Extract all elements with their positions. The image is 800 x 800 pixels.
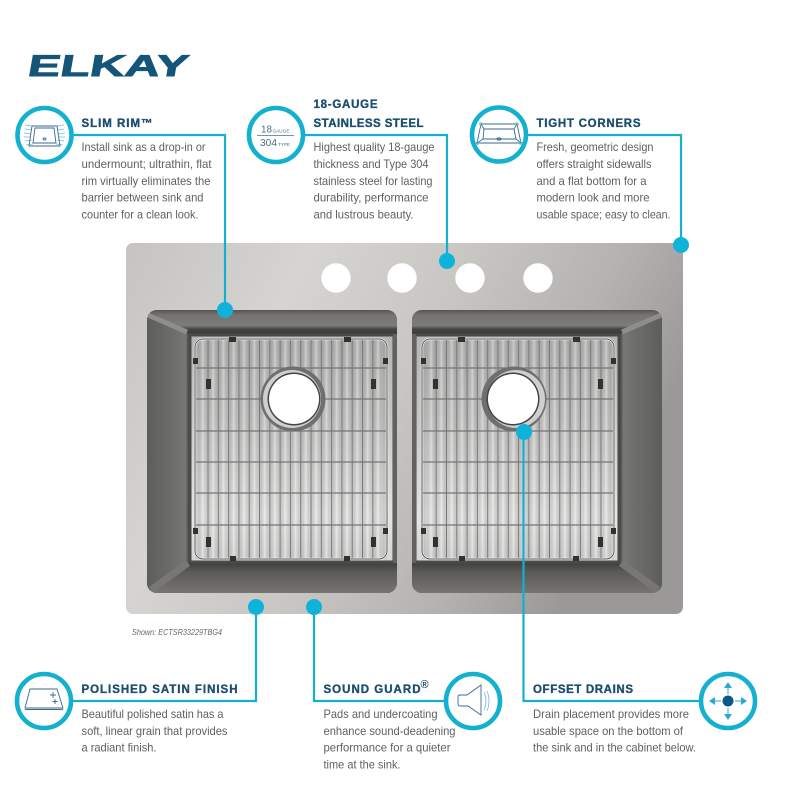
heading <box>314 99 424 130</box>
leader line <box>70 607 256 701</box>
body text: rim virtually eliminates the <box>82 174 211 188</box>
leader line <box>70 135 225 310</box>
body text: usable space on the bottom of <box>533 724 684 738</box>
heading: OFFSET DRAINS <box>533 684 633 696</box>
heading: POLISHED SATIN FINISH <box>82 684 238 696</box>
leader line <box>302 135 447 261</box>
body text: counter for a clean look. <box>82 208 198 222</box>
anchor dot <box>516 424 532 440</box>
callout: tight corners <box>472 108 689 253</box>
body text <box>533 707 696 754</box>
body text: and a flat bottom for a <box>536 174 647 188</box>
heading <box>324 679 429 696</box>
heading: SLIM RIM™ <box>82 118 152 130</box>
anchor dot <box>673 237 689 253</box>
icon: polished surface <box>17 674 71 728</box>
body text: barrier between sink and <box>82 190 204 204</box>
faucet holes <box>321 263 553 293</box>
logo: Elkay: ELKAY <box>25 50 191 83</box>
callout: offset drains <box>516 424 755 754</box>
body text: Fresh, geometric design <box>536 140 654 154</box>
body text: Install sink as a drop-in or <box>82 140 206 154</box>
anchor dot <box>217 302 233 318</box>
icon: gauge label: TYPE <box>278 142 290 147</box>
icon: gauge label: 18 <box>261 124 272 136</box>
anchor dot <box>306 599 322 615</box>
leader line <box>524 432 702 701</box>
icon: sink rim <box>18 108 72 162</box>
icon: gauge label <box>249 108 303 162</box>
heading: 18-GAUGE <box>314 99 378 111</box>
body text <box>82 140 212 222</box>
body text: a radiant finish. <box>82 740 156 754</box>
body text: the sink and in the cabinet below. <box>533 740 696 754</box>
body text: stainless steel for lasting <box>314 174 432 188</box>
body text: soft, linear grain that provides <box>82 724 228 738</box>
right drain <box>482 366 546 432</box>
body text: Drain placement provides more <box>533 707 689 721</box>
body text <box>324 707 456 772</box>
body text: Highest quality 18-gauge <box>314 140 435 154</box>
anchor dot <box>439 253 455 269</box>
body text: offers straight sidewalls <box>536 157 652 171</box>
body text: and lustrous beauty. <box>314 208 414 222</box>
body text <box>82 707 228 754</box>
leader line <box>314 607 447 701</box>
body text: performance for a quieter <box>324 740 450 754</box>
callout: 18-gauge stainless steel <box>249 99 455 269</box>
anchor dot <box>248 599 264 615</box>
heading: TIGHT CORNERS <box>536 118 641 130</box>
body text: modern look and more <box>536 190 650 204</box>
icon: gauge label: 304 <box>260 138 277 149</box>
body text: usable space; easy to clean. <box>536 208 670 222</box>
callout: sound guard <box>306 599 500 772</box>
left basin <box>147 310 397 593</box>
model caption: Shown: ECTSR33229TBG4 <box>132 627 222 637</box>
body text: thickness and Type 304 <box>314 157 429 171</box>
heading: SOUND GUARD <box>324 684 420 696</box>
body text: durability, performance <box>314 190 429 204</box>
body text: Beautiful polished satin has a <box>82 707 224 721</box>
callout: polished satin finish <box>17 599 264 754</box>
icon: drain arrows <box>701 674 755 728</box>
heading: ® <box>420 679 429 691</box>
callout: slim rim <box>18 108 233 318</box>
body text: Pads and undercoating <box>324 707 438 721</box>
body text <box>536 140 670 222</box>
leader line <box>525 135 681 245</box>
right basin <box>412 310 662 593</box>
sink photo <box>126 243 683 614</box>
body text: undermount; ultrathin, flat <box>82 157 212 171</box>
icon: sink corners <box>472 108 526 162</box>
icon: speaker <box>446 674 500 728</box>
heading: STAINLESS STEEL <box>314 118 424 130</box>
icon: gauge label: GAUGE <box>272 128 290 134</box>
body text <box>314 140 435 222</box>
body text: time at the sink. <box>324 758 400 772</box>
left drain <box>260 366 326 432</box>
body text: enhance sound-deadening <box>324 724 456 738</box>
